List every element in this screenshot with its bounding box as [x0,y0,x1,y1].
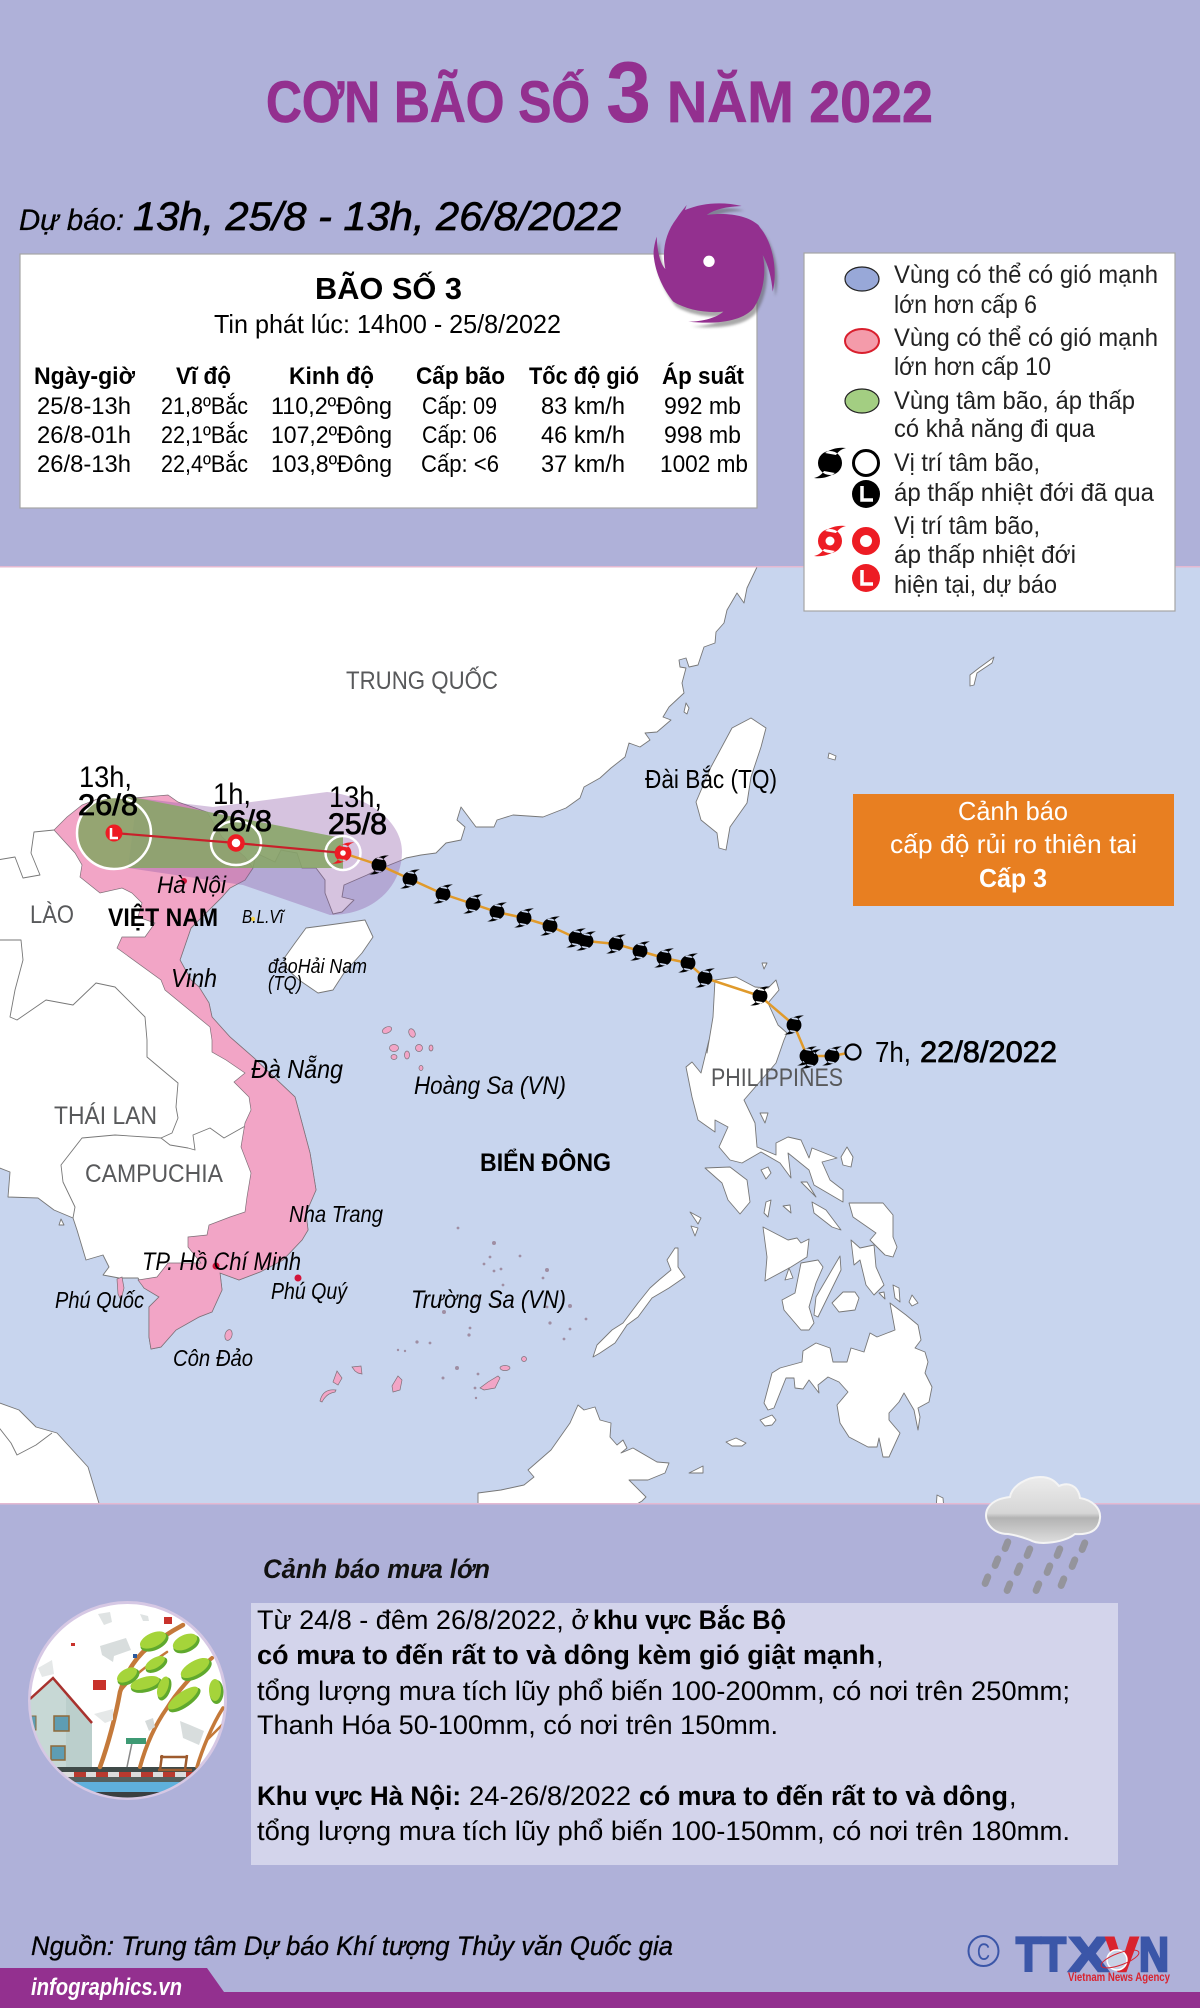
land: Philippines islands [59,657,994,1510]
tree foliage [118,1632,224,1712]
flying debris [38,1612,204,1745]
legend icon: strong wind above level 6 [845,267,879,291]
illustration: house and trees in wind [25,1602,230,1804]
table header row: Áp suất [662,362,744,390]
storm centre zone: green cone [77,797,343,869]
tree trunks [100,1625,223,1767]
legend icons: current and forecast positions [814,526,880,592]
table heading: BÃO SỐ 3 [315,270,462,306]
panel: rain warning text: , [1009,1781,1017,1811]
table row 1: 992 mb [664,393,741,420]
table row 3: 37 km/h [541,451,625,478]
table row 3: Cấp: <6 [421,451,499,478]
table header row: Ngày-giờ [34,363,136,390]
country labels: PHILIPPINES [711,1064,843,1092]
bench [158,1755,192,1770]
legend icon: strong wind above level 10 [845,329,879,353]
city labels: Đà Nẵng [251,1054,343,1084]
panel: legend [804,253,1175,611]
callout: risk level warning [853,794,1174,906]
agency letters: X [1069,1929,1108,1982]
callout: risk level warning: Cảnh báo [958,796,1068,826]
table row 2: 998 mb [664,422,741,449]
city labels: Trường Sa (VN) [411,1286,566,1314]
panel: rain warning text: , [876,1640,884,1670]
country labels: CAMPUCHIA [85,1160,223,1188]
legend text: Vùng có thể có gió mạnh [894,261,1158,289]
table row 3: 1002 mb [660,451,748,478]
panel: rain warning text: có mưa to đến rất to và dông [639,1781,1008,1811]
panel: rain warning text: có mưa to đến rất to và dông kèm gió giật mạnh [257,1640,875,1670]
land: Borneo [478,1405,669,1510]
panel: rain warning text: tổng lượng mưa tích lũy phổ biến 100-200mm, có nơi trên 250mm; [257,1676,1070,1706]
agency letters [1016,1929,1169,1982]
footer bar with site tab: infographics.vn [31,1974,182,2001]
forecast period heading: Dự báo: [19,204,124,237]
table row 1: 25/8-13h [37,393,131,420]
agency letters: N [1139,1929,1169,1982]
land: southwest peninsula [0,1402,101,1510]
icon: purple typhoon [654,203,777,327]
globe [1099,1947,1141,1971]
forecast date labels [78,761,387,841]
forecast date labels: 13h, [79,761,132,794]
panel: rain warning text: Khu vực Hà Nội: [257,1781,461,1811]
section divider [0,1503,1200,1504]
background: top band [0,0,1200,567]
legend text: áp thấp nhiệt đới [894,541,1076,569]
land: China and Indochina [0,560,760,1349]
street sign [126,1738,146,1767]
background: bottom band [0,1504,1200,2008]
table row 1: Cấp: 09 [422,393,497,420]
bold place labels: VIỆT NAM [108,902,218,932]
legend icon: storm centre zone [845,389,879,413]
bold place labels: BIỂN ĐÔNG [480,1147,611,1177]
table row 2: 107,2ºĐông [271,422,392,449]
forecast position markers [106,824,354,864]
table row 1: 21,8ºBắc [161,393,248,420]
table header row [34,362,744,390]
agency name: Vietnam News Agency [1068,1972,1171,1984]
legend text: có khả năng đi qua [894,415,1095,443]
city labels: (TQ) [268,973,302,995]
country labels: TRUNG QUỐC [346,665,498,695]
legend text: Vị trí tâm bão, [894,512,1040,540]
legend text: lớn hơn cấp 10 [894,353,1051,381]
city labels [55,872,566,1371]
issue time: Tin phát lúc: 14h00 - 25/8/2022 [214,309,561,339]
agency letters: V [1106,1929,1138,1982]
legend text: Vùng tâm bão, áp thấp [894,387,1135,415]
storm wind zone: purple cone [128,792,402,915]
start label: 7h, 22/8/2022: 22/8/2022 [920,1036,1057,1069]
heading: rain warning: Cảnh báo mưa lớn [263,1554,490,1584]
legend icons: past positions [814,448,880,508]
forecast date labels: 25/8 [328,808,387,841]
table row 2: 26/8-01h [37,422,131,449]
panel: rain warning text: tổng lượng mưa tích lũy phổ biến 100-150mm, có nơi trên 180mm. [257,1816,1070,1846]
legend text: Vùng có thể có gió mạnh [894,324,1158,352]
forecast date labels: 26/8 [78,789,138,822]
country labels [30,665,843,1188]
city labels: Hà Nội [157,872,227,899]
table header row: Kinh độ [289,363,374,390]
legend text: hiện tại, dự báo [894,571,1057,599]
table row 2: Cấp: 06 [422,422,497,449]
table row 2: 22,1ºBắc [161,422,248,449]
start label: 7h, 22/8/2022: 7h, [875,1037,911,1069]
callout: risk level warning: Cấp 3 [979,863,1047,893]
legend text [894,261,1158,599]
forecast uncertainty circles [77,797,360,870]
title: CƠN BÃO SỐ [266,70,590,135]
city labels: Phú Quý [271,1278,348,1304]
city dots [181,878,302,1282]
forecast date labels: 13h, [329,781,382,814]
footer bar with site tab [0,1968,1200,2008]
city labels: Nha Trang [289,1201,383,1227]
callout: risk level warning: cấp độ rủi ro thiên tai [890,829,1137,859]
title: 3 [606,45,651,141]
country borders [0,830,247,1455]
legend text: Vị trí tâm bão, [894,449,1040,477]
logo: TTXVN [968,1929,1171,1984]
past storm positions [369,856,860,1068]
section divider lines [0,566,1200,568]
Trường Sa reef dots [397,1227,587,1399]
legend text: áp thấp nhiệt đới đã qua [894,479,1154,507]
title [266,45,933,141]
legend text: lớn hơn cấp 6 [894,291,1037,319]
panel: storm data table [20,254,757,508]
land: Hainan [285,920,373,993]
forecast date labels: 26/8 [212,805,272,838]
city labels: B.L.Vĩ [242,907,286,927]
city labels: đảoHải Nam [268,956,367,978]
source line: Nguồn: Trung tâm Dự báo Khí tượng Thủy văn Quốc gia [31,1931,673,1961]
label: Đài Bắc: Đài Bắc (TQ) [645,764,777,794]
icon: rain cloud [981,1477,1100,1595]
copyright mark [968,1936,998,1966]
panel: rain warning text: Từ 24/8 - đêm 26/8/2022, ở [257,1605,589,1635]
table row 1 [37,393,741,420]
table row 3 [37,451,748,478]
table header row: Vĩ độ [176,363,231,390]
table row 3: 26/8-13h [37,451,131,478]
table row 3: 103,8ºĐông [271,451,392,478]
past storm track line [343,853,853,1056]
table row 2 [37,422,741,449]
city labels: TP. Hồ Chí Minh [142,1248,301,1276]
table row 2: 46 km/h [541,422,625,449]
panel: rain warning text: Thanh Hóa 50-100mm, có nơi trên 150mm. [257,1710,778,1740]
map: sea, land, storm track and labels [0,560,1200,1510]
Vietnam islands: Phú Quốc, Côn Đảo, Hoàng Sa, Trường Sa [117,1025,526,1402]
panel: rain warning text: khu vực Bắc Bộ [593,1604,786,1635]
country labels: THÁI LAN [54,1101,157,1130]
road and water [57,1767,198,1798]
Vietnam mainland [54,795,316,1349]
table row 1: 83 km/h [541,393,625,420]
city labels: Vinh [171,963,217,993]
panel: rain warning text [251,1603,1118,1865]
table row 1: 110,2ºĐông [271,393,392,420]
table header row: Cấp bão [416,363,505,390]
bold place labels [108,902,611,1177]
table row 3: 22,4ºBắc [161,451,248,478]
city labels: Phú Quốc [55,1287,144,1313]
land: Taiwan [696,718,766,850]
forecast date labels: 1h, [213,778,251,811]
country labels: LÀO [30,900,74,929]
table header row: Tốc độ gió [529,363,639,390]
copyright mark: C [977,1939,990,1966]
city labels: Côn Đảo [173,1345,253,1371]
house [28,1678,92,1768]
panel: rain warning text: 24-26/8/2022 [469,1781,631,1811]
forecast period heading: 13h, 25/8 - 13h, 26/8/2022 [133,195,621,239]
agency letters: TT [1016,1929,1066,1982]
city labels: Hoàng Sa (VN) [414,1072,566,1100]
title: NĂM 2022 [667,70,933,135]
forecast track line [114,833,343,853]
